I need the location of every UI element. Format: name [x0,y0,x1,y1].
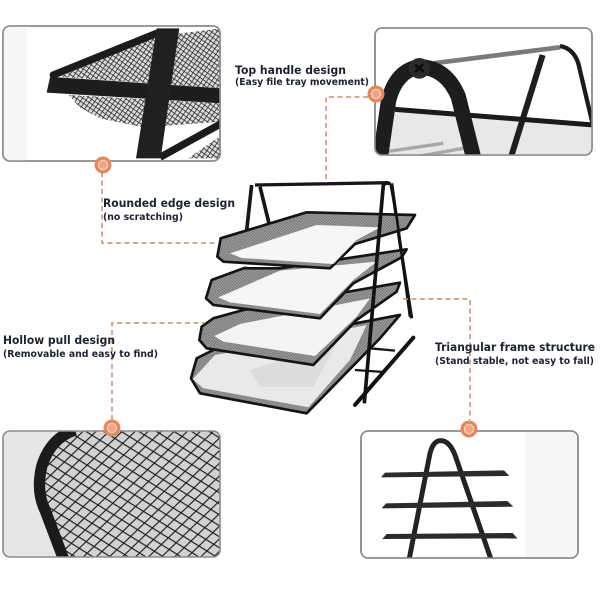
connector: hollow pull [112,323,205,420]
marker: top handle [368,86,384,102]
tray 2 [206,249,407,318]
label: rounded edge design [103,196,235,223]
panel: rounded edge close-up [3,26,222,161]
marker: rounded edge [94,156,112,174]
label: rounded edge design: (no scratching) [103,212,183,223]
marker: hollow pull [104,420,120,436]
connector: rounded edge [102,172,217,243]
label: rounded edge design: Rounded edge design [103,196,235,210]
label: hollow pull design: Hollow pull design [3,333,115,347]
front frame [355,183,413,405]
back frame [246,183,412,372]
label: triangular frame structure: (Stand stable, not easy to fall) [435,356,594,367]
post 3 [243,308,245,318]
illustration: four-tier mesh file tray [191,183,415,413]
post 2 [244,267,246,283]
connector: triangular frame [403,299,470,420]
tray 4 [191,315,400,413]
label: top handle design: Top handle design [235,63,346,77]
panel: mesh close-up [3,428,223,560]
tray 1 [217,212,415,268]
marker: triangular frame [460,420,478,438]
label: top handle design: (Easy file tray movement) [235,77,369,88]
label: top handle design [235,63,369,88]
label: hollow pull design: (Removable and easy to find) [3,349,158,360]
tray 3 [199,283,400,365]
connector: top handle [326,97,368,183]
label: hollow pull design [3,333,158,360]
panel: triangular frame close-up [361,431,578,558]
panel: top handle close-up [375,28,593,157]
label: triangular frame structure [435,340,595,367]
